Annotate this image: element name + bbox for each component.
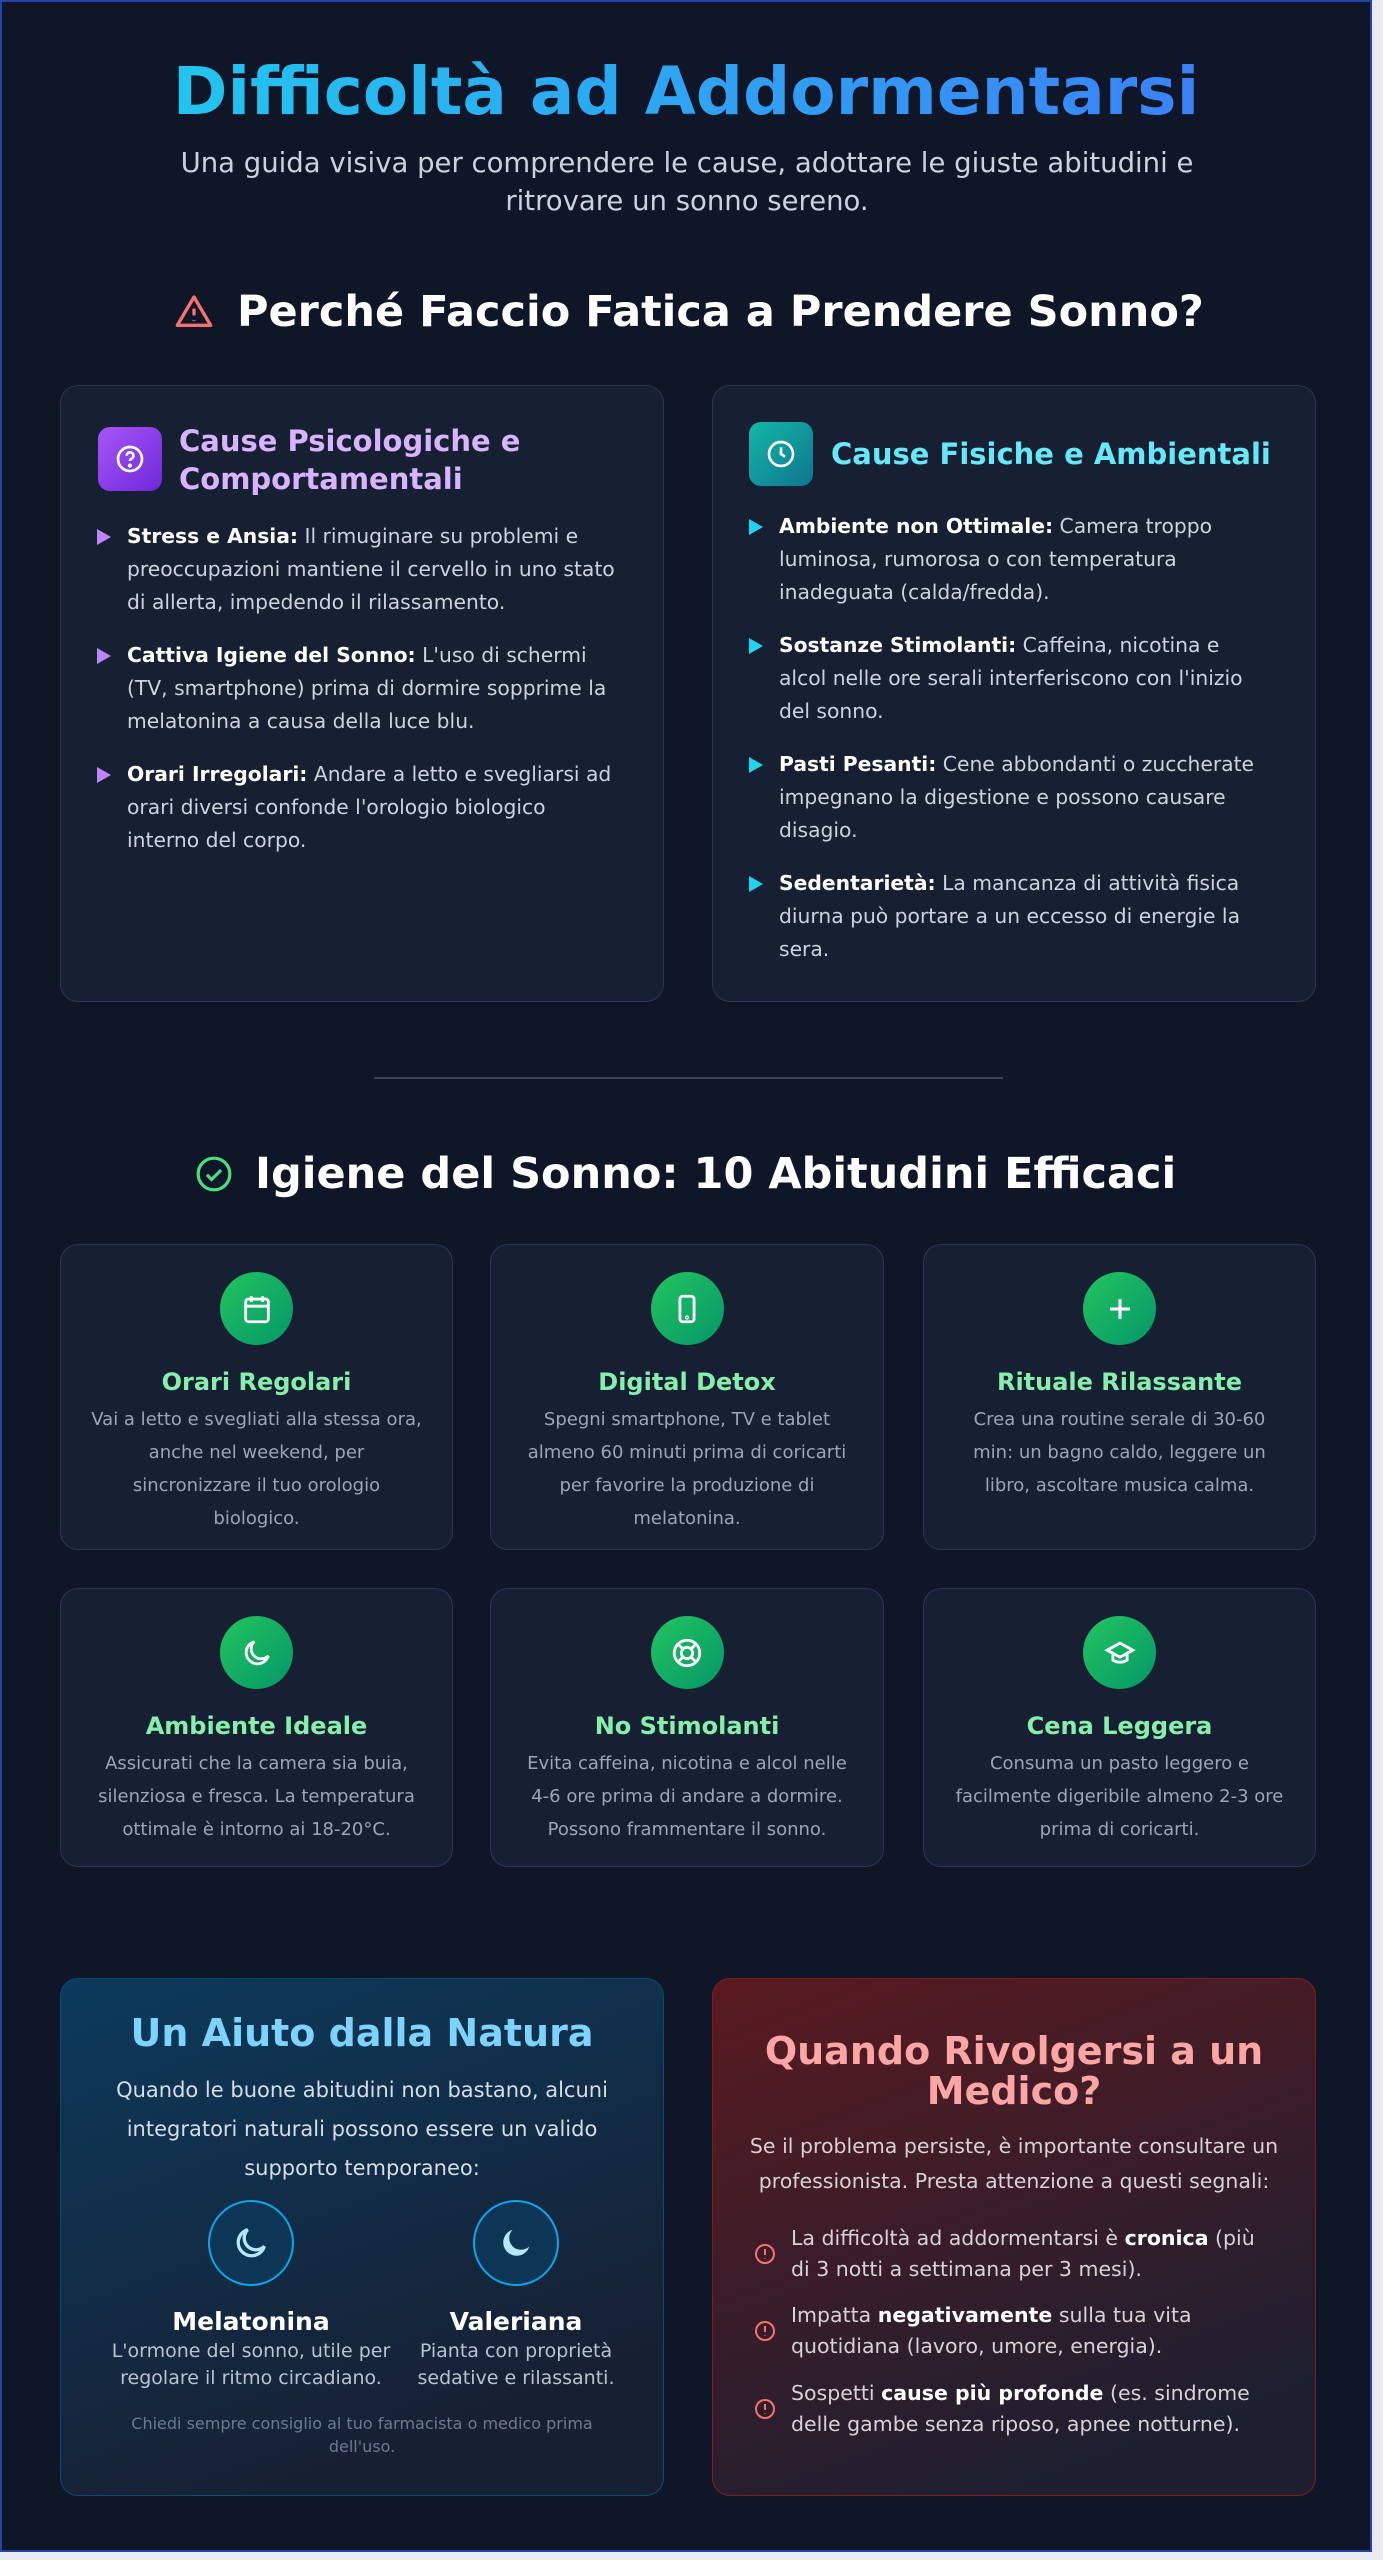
heading bbox=[765, 2029, 1263, 2113]
panel: cause psicologiche bbox=[60, 385, 664, 1002]
bullet: Cattiva Igiene del Sonno: L'uso di schermi (TV, smartphone) prima di dormire sopprime la melatonina a causa della luce blu. bbox=[127, 643, 606, 733]
item: melatonina: L'ormone del sonno, utile per regolare il ritmo circadiano. bbox=[112, 2340, 390, 2389]
habit: no stimolanti: Evita caffeina, nicotina e alcol nelle 4-6 ore prima di andare a dormire. Possono frammentare il sonno. bbox=[527, 1753, 847, 1840]
habit: orari: sincronizzare il tuo orologio bbox=[133, 1475, 380, 1496]
bullet: Ambiente non Ottimale: Camera troppo luminosa, rumorosa o con temperatura inadeguata (calda/fredda). bbox=[779, 514, 1212, 604]
icon: check bbox=[196, 1156, 232, 1192]
icon: moon bbox=[208, 2200, 294, 2286]
icon: warning bbox=[176, 295, 212, 327]
title: Difficoltà ad Addormentarsi bbox=[173, 53, 1199, 130]
habit: rituale bbox=[923, 1244, 1316, 1550]
habit: ambiente: Ambiente Ideale bbox=[146, 1712, 367, 1740]
bullet: Pasti Pesanti: Cene abbondanti o zuccherate impegnano la digestione e possono causare disagio. bbox=[779, 752, 1254, 842]
bullet bbox=[97, 762, 611, 852]
heading: Cause Psicologiche e bbox=[179, 424, 520, 458]
bullet: alcol nelle ore serali interferiscono con l'inizio del sonno. bbox=[779, 666, 1243, 723]
habit: no stimolanti: No Stimolanti bbox=[595, 1712, 779, 1740]
habit: rituale: Crea una routine serale di 30-60 min: un bagno caldo, leggere un libro, ascoltare musica calma. bbox=[973, 1409, 1266, 1496]
item bbox=[755, 2226, 1255, 2281]
habit: ambiente bbox=[60, 1588, 453, 1867]
bullet bbox=[749, 633, 1243, 723]
habit: orari: anche nel weekend, per bbox=[149, 1442, 364, 1463]
item: melatonina bbox=[112, 2200, 390, 2389]
note: Chiedi sempre consiglio al tuo farmacista o medico prima dell'uso. bbox=[131, 2414, 593, 2456]
item: valeriana: Pianta con proprietà sedative e rilassanti. bbox=[418, 2340, 614, 2389]
heading: Medico? bbox=[927, 2069, 1101, 2113]
habit: digital detox: Digital Detox bbox=[598, 1368, 776, 1396]
habit: orari bbox=[60, 1244, 453, 1550]
habit: digital detox: Spegni smartphone, TV e tablet almeno 60 minuti prima di coricarti per favorire la produzione di melatonina. bbox=[528, 1409, 846, 1529]
bullet: interno del corpo. bbox=[127, 828, 306, 852]
icon: plant bbox=[473, 2200, 559, 2286]
habit: ambiente: Assicurati che la camera sia buia, silenziosa e fresca. La temperatura ottimale è intorno ai 18-20°C. bbox=[98, 1753, 415, 1840]
habit: no stimolanti bbox=[490, 1588, 884, 1867]
bullet: Orari Irregolari: Andare a letto e svegliarsi ad orari diversi confonde l'orologio biologico bbox=[127, 762, 611, 819]
heading: Un Aiuto dalla Natura bbox=[131, 2011, 593, 2055]
intro: Quando le buone abitudini non bastano, alcuni integratori naturali possono essere un valido supporto temporaneo: bbox=[116, 2078, 608, 2180]
subtitle: Una guida visiva per comprendere le cause, adottare le giuste abitudini e ritrovare un sonno sereno. bbox=[181, 147, 1193, 217]
item: melatonina: Melatonina bbox=[172, 2307, 330, 2336]
habit: orari: Orari Regolari bbox=[162, 1368, 351, 1396]
bullet: Sedentarietà: La mancanza di attività fisica diurna può portare a un eccesso di energie la sera. bbox=[779, 871, 1240, 961]
panel: medico bbox=[712, 1978, 1316, 2496]
habit: cena: Cena Leggera bbox=[1027, 1712, 1212, 1740]
habit: cena: Consuma un pasto leggero e facilmente digeribile almeno 2-3 ore prima di coricarti. bbox=[956, 1753, 1283, 1840]
item: Impatta negativamente sulla tua vita quotidiana (lavoro, umore, energia). bbox=[791, 2303, 1192, 2358]
panel: natura bbox=[60, 1978, 664, 2496]
item: La difficoltà ad addormentarsi è cronica (più bbox=[791, 2226, 1255, 2250]
item: Sospetti cause più profonde (es. sindrome delle gambe senza riposo, apnee notturne). bbox=[791, 2381, 1250, 2436]
icon: question bbox=[98, 427, 162, 491]
heading: igiene: Igiene del Sonno: 10 Abitudini Efficaci bbox=[255, 1149, 1176, 1199]
heading: Quando Rivolgersi a un bbox=[765, 2029, 1263, 2073]
item: di 3 notti a settimana per 3 mesi). bbox=[791, 2257, 1142, 2281]
intro: Se il problema persiste, è importante consultare un professionista. Presta attenzione a questi segnali: bbox=[750, 2134, 1278, 2193]
bullet: Stress e Ansia: Il rimuginare su problemi e preoccupazioni mantiene il cervello in uno stato di allerta, impedendo il rilassamento. bbox=[127, 524, 615, 614]
heading: perché: Perché Faccio Fatica a Prendere Sonno? bbox=[237, 287, 1204, 337]
habit: orari: Vai a letto e svegliati alla stessa ora, bbox=[91, 1409, 422, 1430]
habit: orari: biologico. bbox=[213, 1508, 300, 1529]
habit: digital detox bbox=[490, 1244, 884, 1550]
panel: cause fisiche bbox=[712, 385, 1316, 1002]
bullet: Sostanze Stimolanti: Caffeina, nicotina e bbox=[779, 633, 1219, 657]
habit: rituale: Rituale Rilassante bbox=[997, 1368, 1242, 1396]
item: valeriana: Valeriana bbox=[450, 2307, 582, 2336]
heading: Comportamentali bbox=[179, 462, 463, 496]
heading bbox=[179, 424, 520, 496]
item: valeriana bbox=[418, 2200, 614, 2389]
habit: cena bbox=[923, 1588, 1316, 1867]
icon: clock bbox=[749, 422, 813, 486]
heading: Cause Fisiche e Ambientali bbox=[831, 437, 1271, 471]
